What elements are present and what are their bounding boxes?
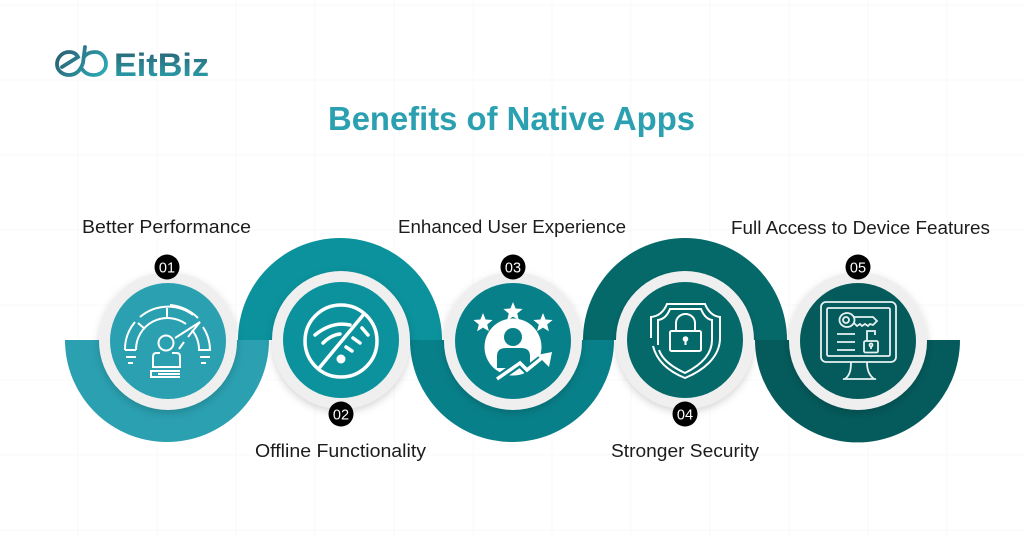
disc: [110, 283, 226, 399]
logo: EitBiz: [57, 47, 209, 83]
label: Enhanced User Experience: [398, 217, 626, 237]
label: Better Performance: [82, 217, 251, 237]
step 1: Better Performance: [82, 217, 251, 410]
number 01: 01: [159, 260, 175, 276]
number 03: 03: [505, 260, 521, 276]
badge 05: [846, 254, 870, 280]
disc: [283, 282, 399, 398]
disc: [800, 283, 916, 399]
disc: [627, 282, 743, 398]
number 05: 05: [850, 260, 866, 276]
label: Full Access to Device Features: [731, 218, 990, 238]
badge 01: [154, 254, 180, 280]
icon: no wifi: [305, 305, 377, 377]
ring: [444, 272, 582, 410]
ribbon segment 4: [583, 238, 787, 340]
ring: [616, 271, 754, 409]
ribbon segment 2: [238, 238, 442, 340]
step 3: Enhanced User Experience: [398, 217, 626, 410]
wave ribbon: [65, 238, 960, 442]
number 04: 04: [677, 408, 693, 424]
number 02: 02: [333, 408, 349, 424]
icon: shield with padlock: [651, 304, 720, 378]
logo mark: [57, 47, 106, 75]
step 5: Full Access to Device Features: [731, 218, 990, 410]
icon: speedometer and person: [125, 305, 210, 377]
label: Stronger Security: [611, 441, 759, 461]
ring: [99, 272, 237, 410]
label: Offline Functionality: [255, 441, 426, 461]
step 2: Offline Functionality: [255, 271, 426, 461]
ribbon segment 3: [410, 340, 614, 442]
disc: [455, 283, 571, 399]
badge 02: [328, 402, 354, 426]
ring: [272, 271, 410, 409]
ring: [789, 272, 927, 410]
logo wordmark: EitBiz: [114, 47, 209, 83]
title: Benefits of Native Apps: [328, 100, 695, 137]
icon: rated user with growth arrow: [473, 302, 553, 379]
badge 03: [500, 254, 526, 280]
icon: monitor with key and padlock: [821, 302, 896, 379]
ribbon segment 1: [65, 340, 269, 442]
ribbon segment 5: [755, 340, 960, 442]
badge 04: [672, 402, 698, 426]
step 4: Stronger Security: [611, 271, 759, 461]
